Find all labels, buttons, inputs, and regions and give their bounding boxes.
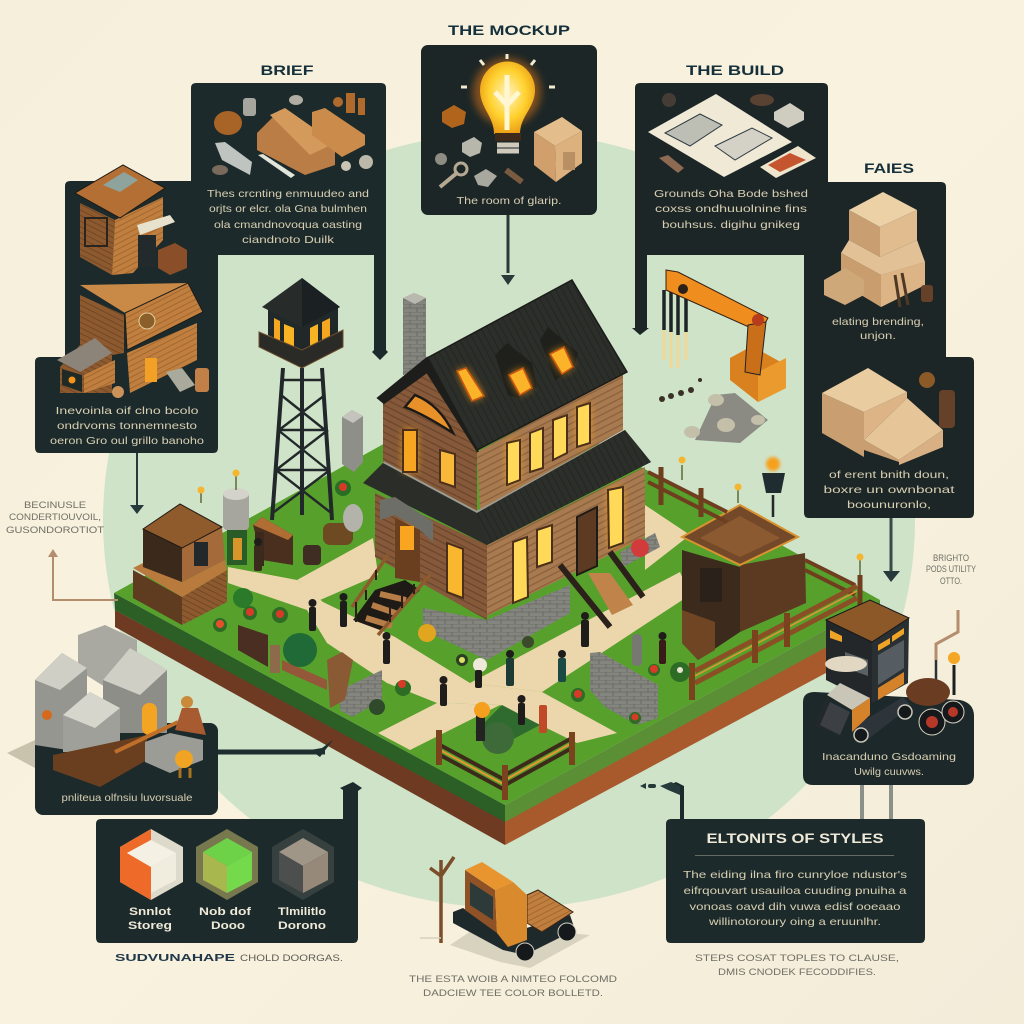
swatch labels: Storeg [128,920,172,932]
elements description [683,869,907,928]
text: machine caption: Uwilg cuuvws. [854,766,924,778]
elements heading: ELTONITS OF STYLES [706,830,884,846]
truck flatbed [527,890,573,932]
panel: machine [803,692,974,785]
crane hanging strands [664,330,686,368]
caption: under truck [409,974,618,998]
right shed walls [682,550,740,660]
tower balcony [259,330,343,368]
right door [577,507,597,575]
arrow: forge to platform [218,740,333,757]
text: workshop description [50,405,204,447]
garden lanterns [198,456,864,575]
roof skylight and dormer windows [457,347,573,401]
arrow: left note connector [48,549,118,600]
annotation: right note: OTTO. [940,576,962,586]
tower lantern room [268,305,338,352]
left shed upper walls [143,529,182,582]
text: brief description: ciandnoto Duilk [242,234,335,246]
small arrow dashes [640,782,680,795]
caption: under swatches [115,952,343,964]
text: machine caption: Inacanduno Gsdoaming [822,751,956,763]
heading: the mockup: THE MOCKUP [448,22,570,38]
upper right wall [477,373,623,510]
text: build description: bouhsus. digihu gnikeg [662,219,800,231]
connector: right note to machine [936,610,958,690]
utility pole [430,857,454,943]
truck shadow [450,925,590,968]
left shed lower walls [133,570,182,625]
icon: stone forge and smith [35,625,206,787]
text: build description: Grounds Oha Bode bshed [654,188,808,200]
left shed roof [143,504,222,548]
panel: forge [7,723,218,815]
swatch labels: Snnlot [129,906,171,918]
caption: under swatches: SUDVUNAHAPE [115,952,235,964]
caption: under truck: DADCIEW TEE COLOR BOLLETD. [423,988,603,998]
right staircase [560,552,643,627]
platform grass top [114,384,880,805]
left staircase [352,555,430,635]
panel: the mockup [421,45,597,215]
elements description: eifrqouvart usauiloa cuuding pnuiha a [684,885,907,897]
icon: wooden workshop [57,283,209,398]
text: build description: coxss ondhuuolnine fins [655,203,807,215]
panel: style swatches [96,782,362,943]
text: faies caption: unjon. [860,330,896,342]
icon: machine building [825,600,909,703]
icon: tracked cart machine [815,652,964,742]
icon: small tools [435,105,522,187]
caption: under truck: THE ESTA WOIB A NIMTEO FOLCOMD [409,974,618,984]
tower legs and bracing [272,368,332,520]
text: materials description [824,469,955,511]
elements panel shape [666,782,925,943]
upper floor windows [403,403,590,487]
wooden crate wall [238,625,317,673]
caption: under elements: STEPS COSAT TOPLES TO CLAUSE, [695,953,899,963]
path: south-west arm [378,703,500,750]
gable arch window [405,395,453,433]
text: brief description [207,188,369,246]
arrow: materials down to machine [883,518,900,582]
path: north-west to south-east [228,567,617,743]
annotation: right note [926,553,976,586]
icon: small wooden shed [75,165,187,275]
annotation: right note: BRIGHTO [933,553,969,563]
swatch labels: Tlmilitlo [278,906,326,918]
window glows [400,347,623,550]
chimney stack [403,293,426,375]
text: materials description: of erent bnith doun, [829,469,949,481]
lower-left wall [375,493,487,620]
forge panel shape [35,723,218,815]
grey pillar [342,410,363,472]
text: brief description: ola cmandnovoqua oasting [214,219,362,231]
heading: the build: THE BUILD [686,62,784,78]
isometric platform [114,384,880,845]
upper gable wall [383,373,477,512]
dormers [495,343,537,398]
elements description: willinotoroury oing a eruunlhr. [708,916,881,928]
icon: stacked wood blocks [824,192,933,307]
left shed [133,504,227,625]
divider [695,855,894,856]
stone wall, right [590,652,658,725]
path: upper branches [297,505,690,600]
grey trim band [383,432,625,513]
path: north-east arm [470,572,690,692]
watchtower [259,278,343,520]
text: materials description: boounuronlo, [847,499,931,511]
text: materials description: boxre un ownbonat [824,484,955,496]
tower roof [262,278,340,327]
swatch labels [128,906,326,932]
ground floor windows [447,487,623,603]
arrow: mockup to house [501,215,515,285]
platform dark green side [114,593,505,822]
icon: cardboard box [534,117,582,182]
annotation: left note [6,500,105,535]
stone foundation [423,608,487,660]
annotation: left note: BECINUSLE [24,500,86,510]
stone wall, left [282,652,382,717]
panel: brief and left stages [35,83,388,453]
heading: brief: BRIEF [260,62,314,78]
text: build description [654,188,808,231]
connector lines below machine panel [862,785,891,819]
heading: faies: FAIES [864,160,914,176]
icon: glowing light bulb [461,54,555,151]
back fences [648,467,860,605]
truck cab [465,870,497,933]
swatch labels: Dorono [278,920,326,932]
icon: blueprint sheet [648,93,816,178]
arrow: workshop to platform [130,453,144,514]
gable roof edge [378,358,478,452]
left stone arch and door [380,497,433,542]
icon: wooden planks and tools [212,93,373,178]
text: workshop description: ondrvoms tonnemnesto [57,420,197,432]
lower roof [363,430,651,545]
platform brown soil side [115,610,505,845]
crane [659,270,786,443]
swatch labels: Dooo [211,920,245,932]
caption: under elements [695,953,899,977]
text: workshop description: oeron Gro oul grillo banoho [50,435,204,447]
text: brief description: Thes crcnting enmuudeo and [207,188,369,200]
main house [352,280,660,660]
elements description: vonoas oavd dih vuwa edisf ooeaao [690,901,901,913]
front fences [439,586,857,800]
main roof [427,280,627,450]
icon: orange and white cube [120,829,183,900]
elements description: The eiding ilna firo cunryloe ndustor's [683,869,907,881]
crane arm [666,270,768,332]
panel: the build, faies and materials [632,83,974,518]
crane base [730,346,786,402]
flowers and bushes [213,480,690,754]
townsfolk figures [254,538,666,733]
annotation: right note: PODS UTILITY [926,564,976,574]
gravel and stones [659,378,702,402]
garden items near tower [223,488,363,566]
right shed [682,505,806,660]
lower-right wall [487,467,645,616]
pale green circle backdrop [103,132,915,908]
forge shadow [7,740,35,768]
icon: green cube [196,829,258,900]
truck wheels [558,923,576,941]
text: workshop description: Inevoinla oif clno bcolo [56,405,199,417]
right shed roof [682,505,798,565]
text: brief description: orjts or elcr. ola Gna bulmhen [209,203,367,215]
caption: under elements: DMIS CNODEK FECODDIFIES. [718,967,876,977]
text: machine caption [822,751,956,778]
text: forge caption: pnliteua olfnsiu luvorsuale [62,792,193,804]
truck scene [420,857,590,968]
annotation: left note: CONDERTIOUVOIL, [9,512,101,522]
text: faies caption: elating brending, [832,316,924,328]
text: mockup caption: The room of glarip. [456,195,562,207]
caption: under swatches: CHOLD DOORGAS. [240,953,343,964]
truck chassis [453,908,575,955]
swatch labels: Nob dof [199,906,251,918]
annotation: left note: GUSONDOROTIOT [6,525,105,535]
text: faies caption [832,316,924,342]
icon: grey cube [272,829,334,900]
panel: elements of styles [640,782,925,943]
icon: wood bale stack [822,368,955,465]
